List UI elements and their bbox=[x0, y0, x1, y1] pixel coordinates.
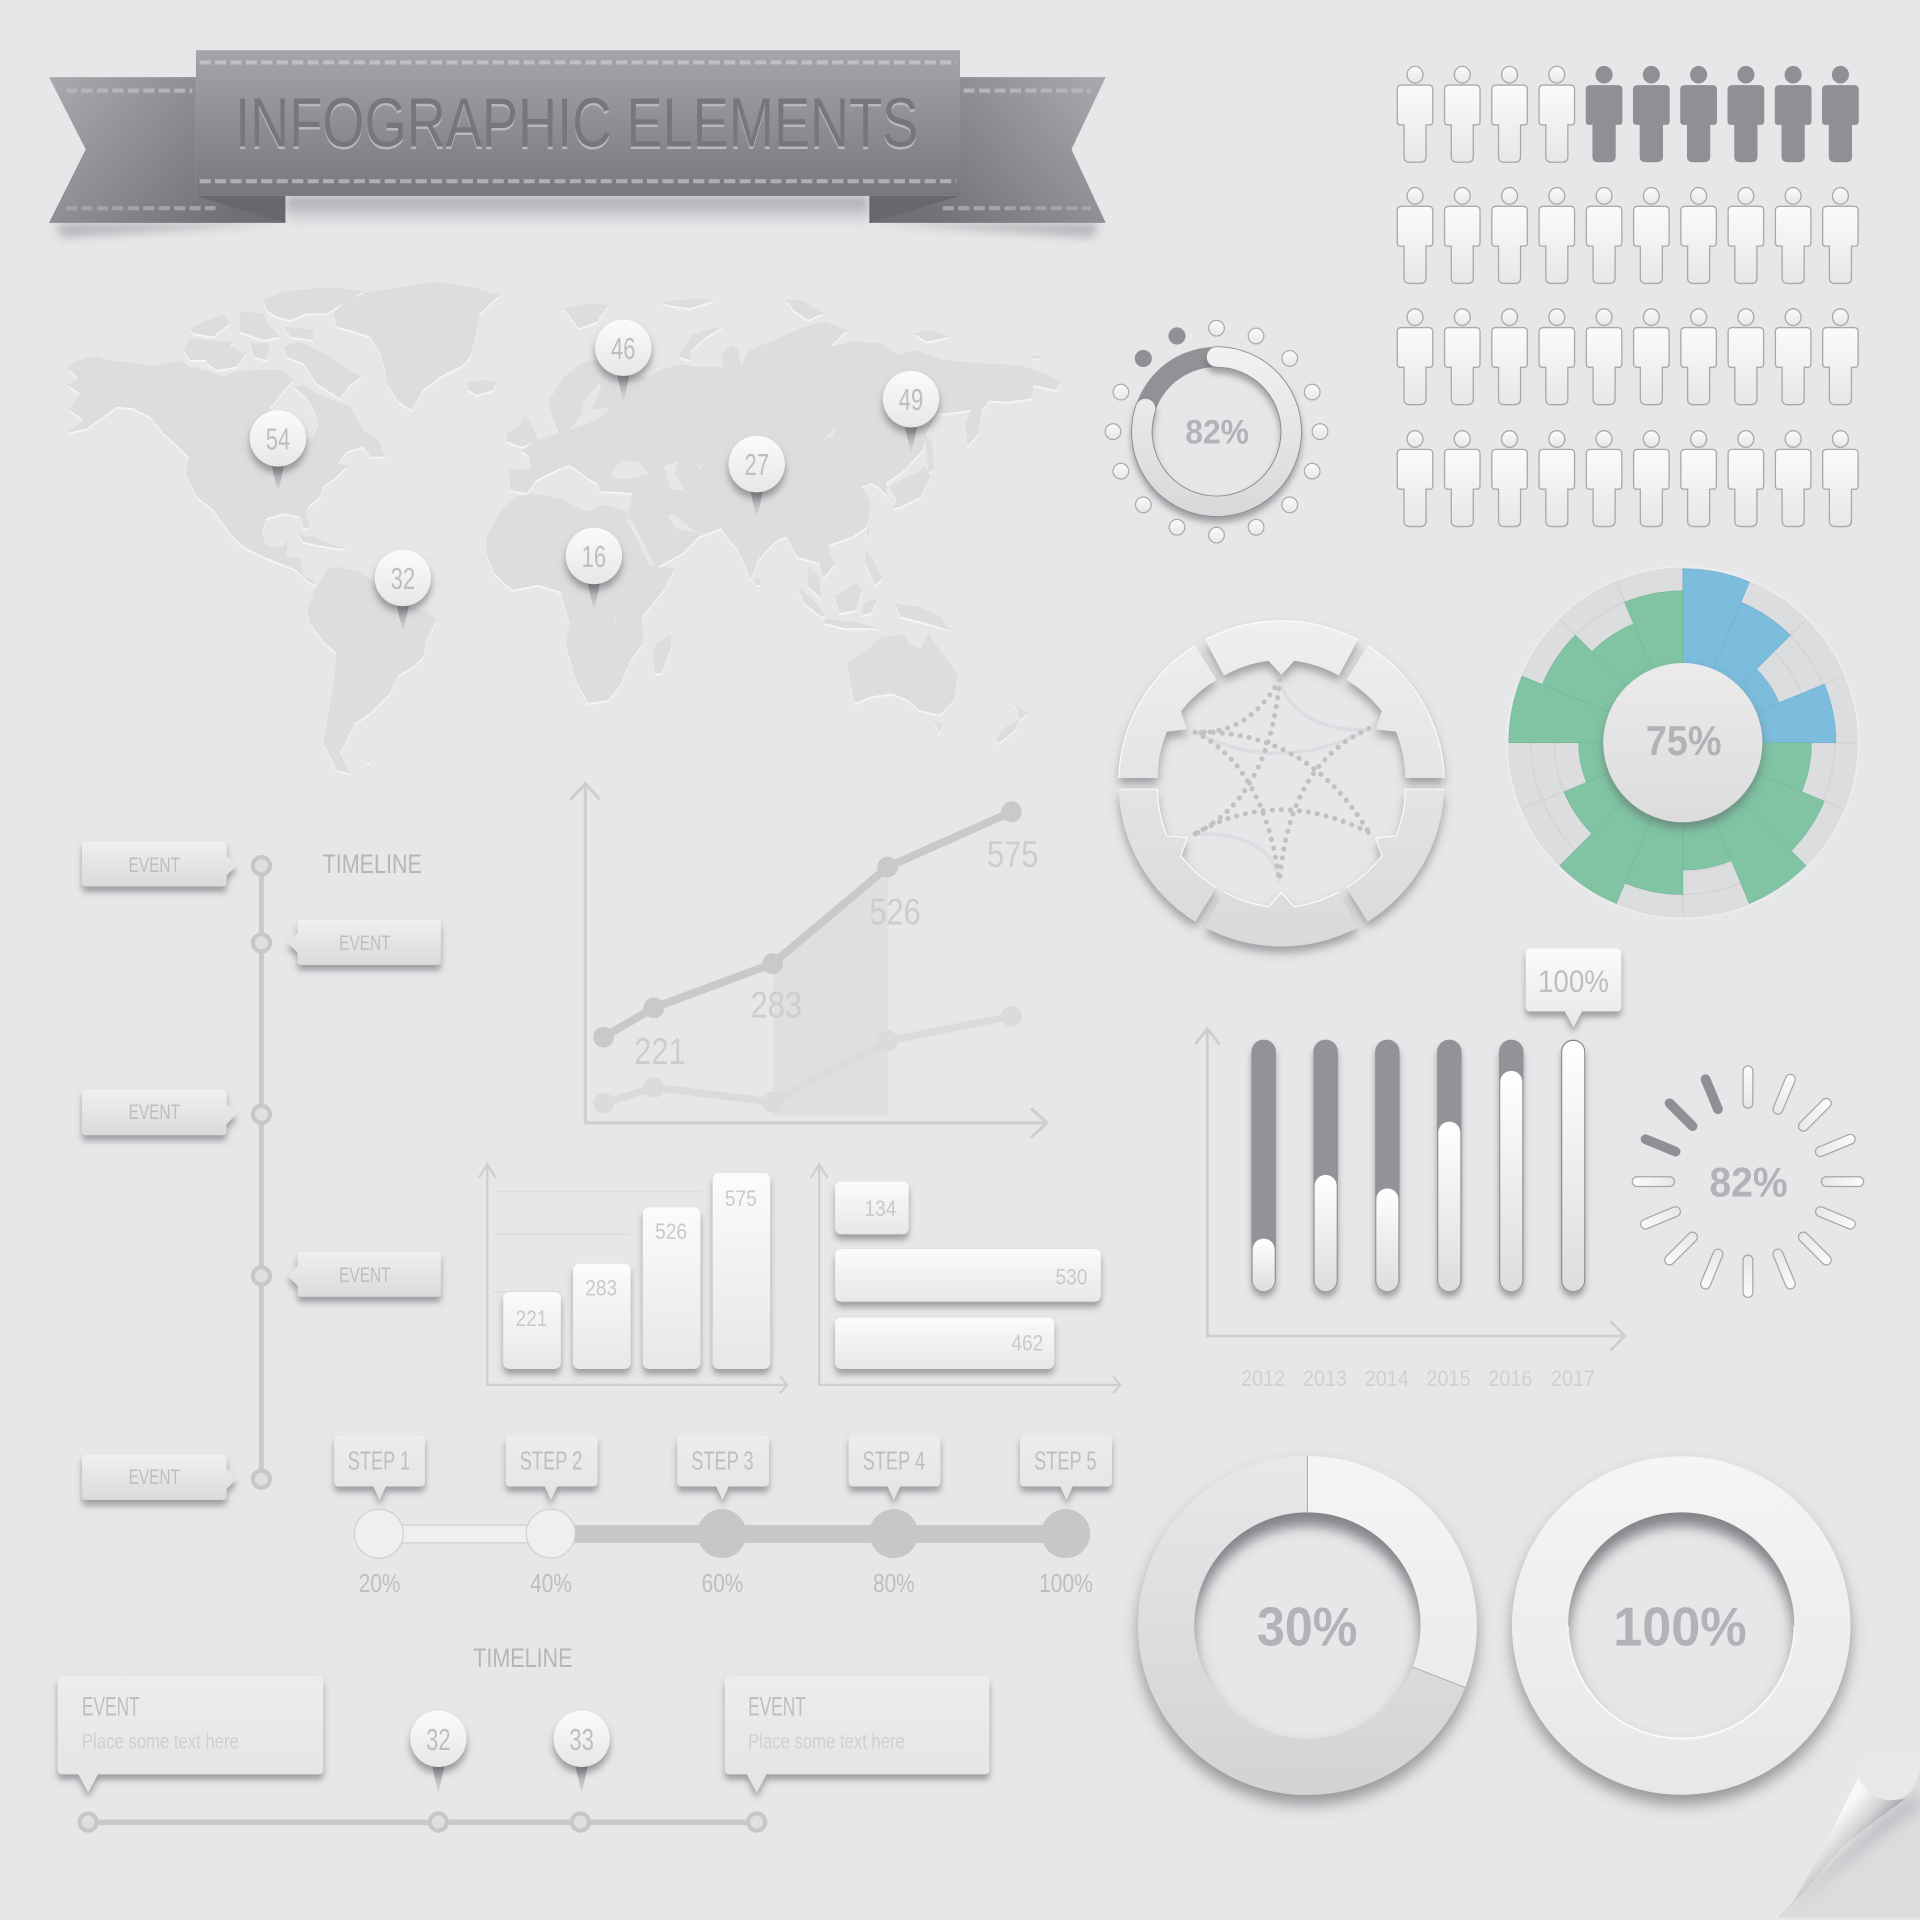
map pin 54 bbox=[250, 410, 306, 493]
polar sectors green bbox=[1509, 591, 1824, 903]
step percentages: 60% bbox=[702, 1570, 743, 1598]
line chart labels bbox=[634, 834, 1038, 1072]
step labels: STEP 3 bbox=[691, 1447, 754, 1475]
bar chart axes bbox=[479, 1164, 787, 1393]
line chart labels: 221 bbox=[634, 1031, 686, 1072]
people pictogram bbox=[1397, 66, 1859, 527]
timeline nodes bbox=[253, 857, 270, 1488]
step labels: STEP 5 bbox=[1034, 1447, 1097, 1475]
progress year labels: 2017 bbox=[1551, 1366, 1595, 1391]
page curl corner bbox=[1778, 1758, 1920, 1918]
event button 4: EVENT bbox=[339, 1264, 391, 1287]
event card right: Place some text here bbox=[748, 1731, 905, 1754]
horizontal bar chart bbox=[811, 1164, 1120, 1393]
ring gauge 82% bbox=[1105, 320, 1328, 543]
step percentages bbox=[359, 1570, 1093, 1598]
bar labels: 575 bbox=[725, 1186, 757, 1211]
event card left bbox=[58, 1676, 323, 1793]
event button 1 bbox=[82, 841, 236, 887]
step percentages: 20% bbox=[359, 1570, 400, 1598]
event button 1: EVENT bbox=[129, 854, 180, 877]
step progress bbox=[334, 1435, 1112, 1598]
polar background bbox=[1507, 567, 1859, 918]
step track light bbox=[354, 1509, 575, 1558]
event button 5 bbox=[82, 1455, 236, 1500]
step track filled bbox=[551, 1509, 1090, 1558]
timeline line and nodes bbox=[80, 1813, 765, 1831]
ring label: 82% bbox=[1185, 413, 1249, 451]
event button 3: EVENT bbox=[129, 1101, 180, 1124]
horizontal timeline heading: TIMELINE bbox=[473, 1643, 572, 1673]
step percentages: 40% bbox=[530, 1570, 572, 1598]
bar labels: 526 bbox=[655, 1219, 687, 1244]
timeline pin 33: 33 bbox=[569, 1723, 594, 1757]
progress year labels: 2015 bbox=[1427, 1366, 1471, 1391]
banner stitches bbox=[66, 62, 1091, 208]
timeline pin 32 bbox=[410, 1711, 467, 1794]
progress bars chart bbox=[1195, 948, 1625, 1391]
dial segments bbox=[1119, 621, 1444, 946]
map pin 27 bbox=[729, 436, 785, 519]
people row 1 bbox=[1397, 66, 1859, 162]
bar labels: 283 bbox=[585, 1276, 617, 1301]
line chart labels: 283 bbox=[751, 985, 802, 1026]
banner: title ribbon bbox=[49, 50, 1106, 238]
polar sectors blue bbox=[1683, 569, 1836, 743]
timeline heading: TIMELINE bbox=[323, 849, 422, 879]
polar label: 75% bbox=[1646, 717, 1722, 764]
progress year labels bbox=[1241, 1366, 1595, 1391]
progress fills bbox=[1253, 1041, 1584, 1291]
polar chart 75% bbox=[1507, 567, 1859, 918]
line chart bbox=[571, 784, 1047, 1138]
step labels: STEP 4 bbox=[863, 1447, 925, 1475]
donut 100 ring bbox=[1512, 1456, 1850, 1795]
progress year labels: 2012 bbox=[1241, 1366, 1285, 1391]
dial dotted star bbox=[1195, 680, 1369, 883]
event button 2: EVENT bbox=[339, 932, 391, 955]
horizontal bar labels bbox=[864, 1196, 1087, 1356]
progress year labels: 2013 bbox=[1303, 1366, 1347, 1391]
map pin 16 bbox=[566, 528, 622, 611]
map pin 32 bbox=[375, 550, 431, 633]
title text shadow: INFOGRAPHIC ELEMENTS bbox=[235, 86, 918, 164]
step labels: STEP 2 bbox=[520, 1447, 582, 1475]
horizontal bar labels: 134 bbox=[864, 1196, 896, 1221]
event button 2 bbox=[288, 920, 441, 965]
progress tracks bbox=[1251, 1040, 1585, 1292]
map pin 46: 46 bbox=[611, 332, 636, 366]
banner left tail bbox=[49, 77, 285, 223]
progress year labels: 2014 bbox=[1365, 1366, 1409, 1391]
bars bbox=[503, 1173, 770, 1369]
horizontal bar labels: 530 bbox=[1056, 1264, 1087, 1289]
timeline spine bbox=[259, 866, 264, 1479]
line chart labels: 575 bbox=[987, 834, 1038, 875]
donut 30 inner shadow bbox=[1194, 1512, 1420, 1641]
dial highlights bbox=[1119, 621, 1444, 907]
timeline pin 32: 32 bbox=[426, 1723, 451, 1757]
progress callout: 100% bbox=[1538, 963, 1609, 999]
map pin 16: 16 bbox=[582, 540, 606, 574]
people row 2 bbox=[1397, 188, 1858, 283]
ring value arc bbox=[1142, 357, 1291, 506]
progress chart axes bbox=[1195, 1029, 1625, 1351]
line chart labels: 526 bbox=[869, 891, 921, 932]
progress callout bbox=[1526, 948, 1621, 1027]
event card right: EVENT bbox=[748, 1692, 806, 1722]
curl underside bbox=[1778, 1769, 1920, 1918]
step percentages: 80% bbox=[873, 1570, 915, 1598]
event card left: Place some text here bbox=[82, 1731, 239, 1754]
ring track bbox=[1142, 357, 1291, 506]
banner right tail bbox=[869, 77, 1106, 223]
horizontal chart axes bbox=[811, 1164, 1120, 1393]
title: INFOGRAPHIC ELEMENTS bbox=[235, 83, 918, 161]
map pin 49: 49 bbox=[899, 383, 923, 417]
spinner ticks bbox=[1632, 1066, 1864, 1297]
event card right bbox=[725, 1676, 989, 1793]
curl flap bbox=[1778, 1777, 1905, 1918]
banner main band bbox=[196, 50, 960, 196]
map pin 49 bbox=[883, 371, 939, 454]
map pin 27: 27 bbox=[744, 448, 769, 482]
progress year labels: 2016 bbox=[1488, 1366, 1532, 1391]
spinner gauge 82% bbox=[1632, 1066, 1864, 1297]
banner shadow bbox=[56, 196, 1098, 238]
donut 100 inner shadow bbox=[1568, 1512, 1794, 1651]
map pin 54: 54 bbox=[266, 422, 290, 456]
step percentages: 100% bbox=[1039, 1570, 1093, 1598]
donut 100 label: 100% bbox=[1613, 1596, 1747, 1658]
line chart axes bbox=[571, 784, 1047, 1138]
horizontal bar labels: 462 bbox=[1011, 1331, 1043, 1356]
ring outer dots bbox=[1105, 320, 1328, 543]
donut 100% bbox=[1512, 1456, 1850, 1795]
bar labels: 221 bbox=[516, 1306, 547, 1331]
vertical bar chart bbox=[479, 1164, 787, 1393]
event button 3 bbox=[82, 1090, 236, 1135]
world map bbox=[1, 0, 1062, 775]
step labels bbox=[348, 1447, 1097, 1475]
polar hub bbox=[1603, 663, 1762, 822]
line chart shaded area bbox=[774, 867, 888, 1116]
event card left: EVENT bbox=[82, 1692, 140, 1722]
vertical timeline bbox=[82, 841, 441, 1500]
curl shadow bbox=[1788, 1794, 1920, 1910]
people row 3 bbox=[1397, 309, 1858, 405]
horizontal bars bbox=[835, 1182, 1101, 1369]
donut 30 label: 30% bbox=[1257, 1596, 1357, 1658]
step labels: STEP 1 bbox=[348, 1447, 410, 1475]
donut 100 inner highlight bbox=[1568, 1626, 1794, 1739]
people row 4 bbox=[1397, 431, 1858, 527]
event button 5: EVENT bbox=[129, 1466, 180, 1489]
bar labels bbox=[516, 1186, 757, 1331]
bar chart grid bbox=[493, 1191, 702, 1292]
banner folds bbox=[196, 196, 960, 223]
timeline pin 33 bbox=[553, 1711, 610, 1794]
line series upper bbox=[594, 802, 1021, 1047]
horizontal timeline bbox=[58, 1643, 989, 1831]
donut 30% bbox=[1138, 1456, 1477, 1795]
step callouts bbox=[334, 1435, 1112, 1500]
star dial bbox=[1119, 621, 1444, 946]
donut 30 ring bbox=[1138, 1456, 1477, 1795]
donut 30 divider bbox=[1307, 1456, 1465, 1688]
spinner label: 82% bbox=[1709, 1158, 1788, 1205]
map pin 46 bbox=[595, 320, 651, 403]
dial light curves bbox=[1195, 683, 1369, 883]
map pin 32: 32 bbox=[391, 562, 415, 596]
event button 4 bbox=[288, 1251, 441, 1297]
curl page corner bbox=[1858, 1758, 1920, 1800]
map landmasses bbox=[1, 0, 1062, 775]
line series lower bbox=[594, 1007, 1021, 1113]
